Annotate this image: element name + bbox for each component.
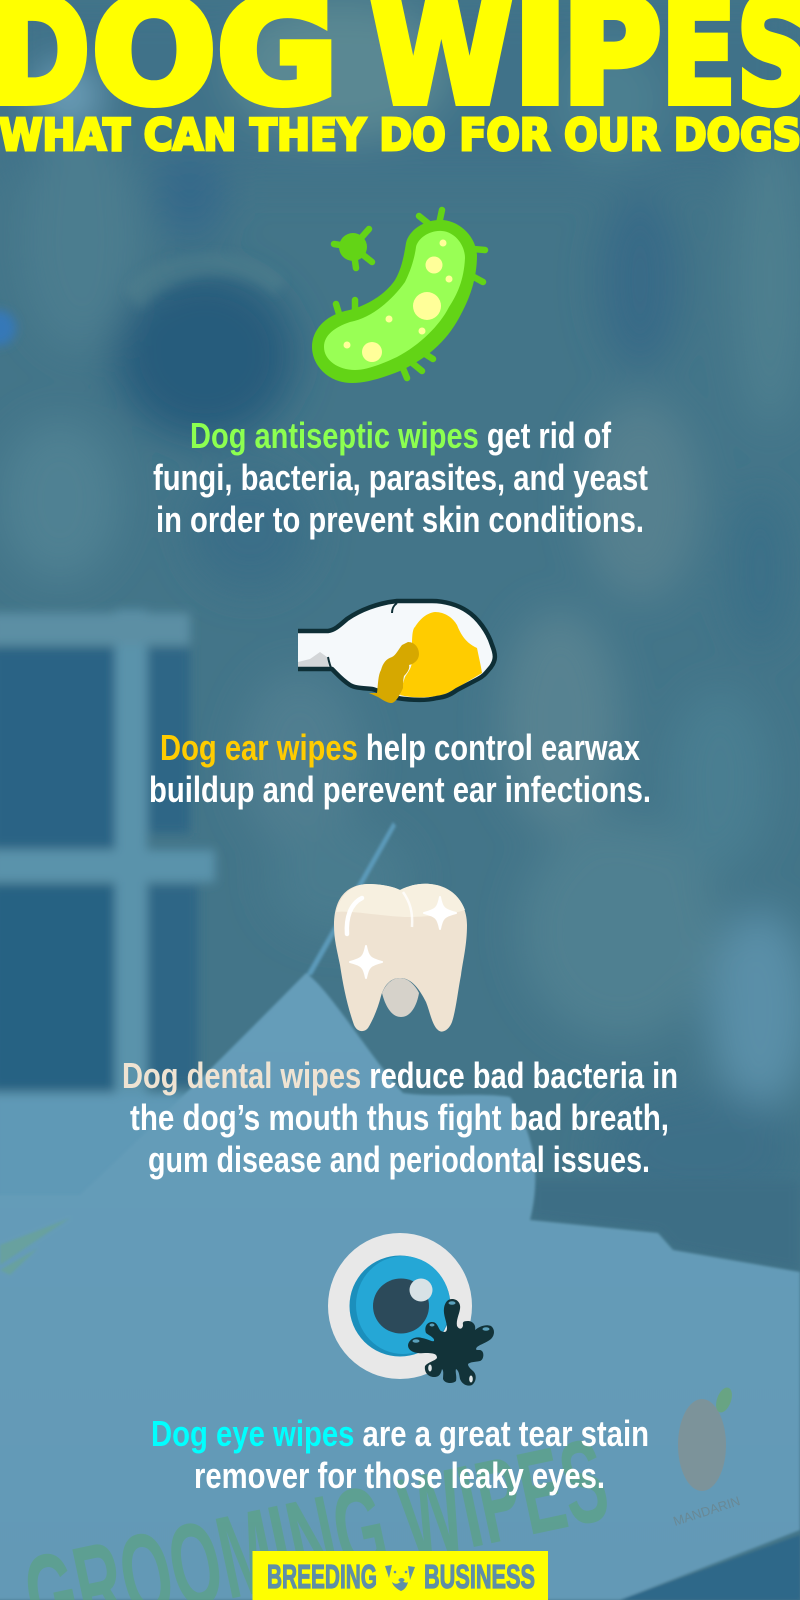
text: ear wipes: Dog ear wipes help control earwax	[160, 727, 640, 768]
footer logo: Breeding Business: BREEDING	[267, 1558, 377, 1595]
wipes package	[0, 822, 800, 1600]
icon: clean tooth	[334, 884, 467, 1032]
icon: dirty dog ear	[298, 601, 495, 703]
packaging text: grooming wipes	[14, 1385, 742, 1600]
text: dental wipes: gum disease and periodontal issues.	[148, 1139, 650, 1180]
text: ear wipes: buildup and perevent ear infections.	[149, 769, 651, 810]
text: dental wipes: the dog’s mouth thus fight bad breath,	[130, 1097, 669, 1138]
icon: bacteria	[312, 210, 485, 383]
text: eye wipes: remover for those leaky eyes.	[194, 1455, 605, 1496]
text: dental wipes: Dog dental wipes reduce bad bacteria in	[122, 1055, 678, 1096]
text: antiseptic wipes: fungi, bacteria, parasites, and yeast	[153, 457, 648, 498]
text: dental wipes	[122, 1055, 678, 1180]
icon: eye with splat	[328, 1233, 494, 1386]
footer logo: Breeding Business: BUSINESS	[424, 1558, 535, 1595]
icon: dog face	[385, 1565, 415, 1591]
text: antiseptic wipes	[153, 415, 648, 540]
text: eye wipes	[151, 1413, 649, 1496]
text: antiseptic wipes: Dog antiseptic wipes get rid of	[190, 415, 612, 456]
text: antiseptic wipes: in order to prevent skin conditions.	[156, 499, 644, 540]
text: ear wipes	[149, 727, 651, 810]
text: eye wipes: Dog eye wipes are a great tear stain	[151, 1413, 649, 1454]
footer logo: Breeding Business	[252, 1551, 548, 1600]
packaging text: grooming wipes: MANDARIN	[671, 1493, 742, 1529]
